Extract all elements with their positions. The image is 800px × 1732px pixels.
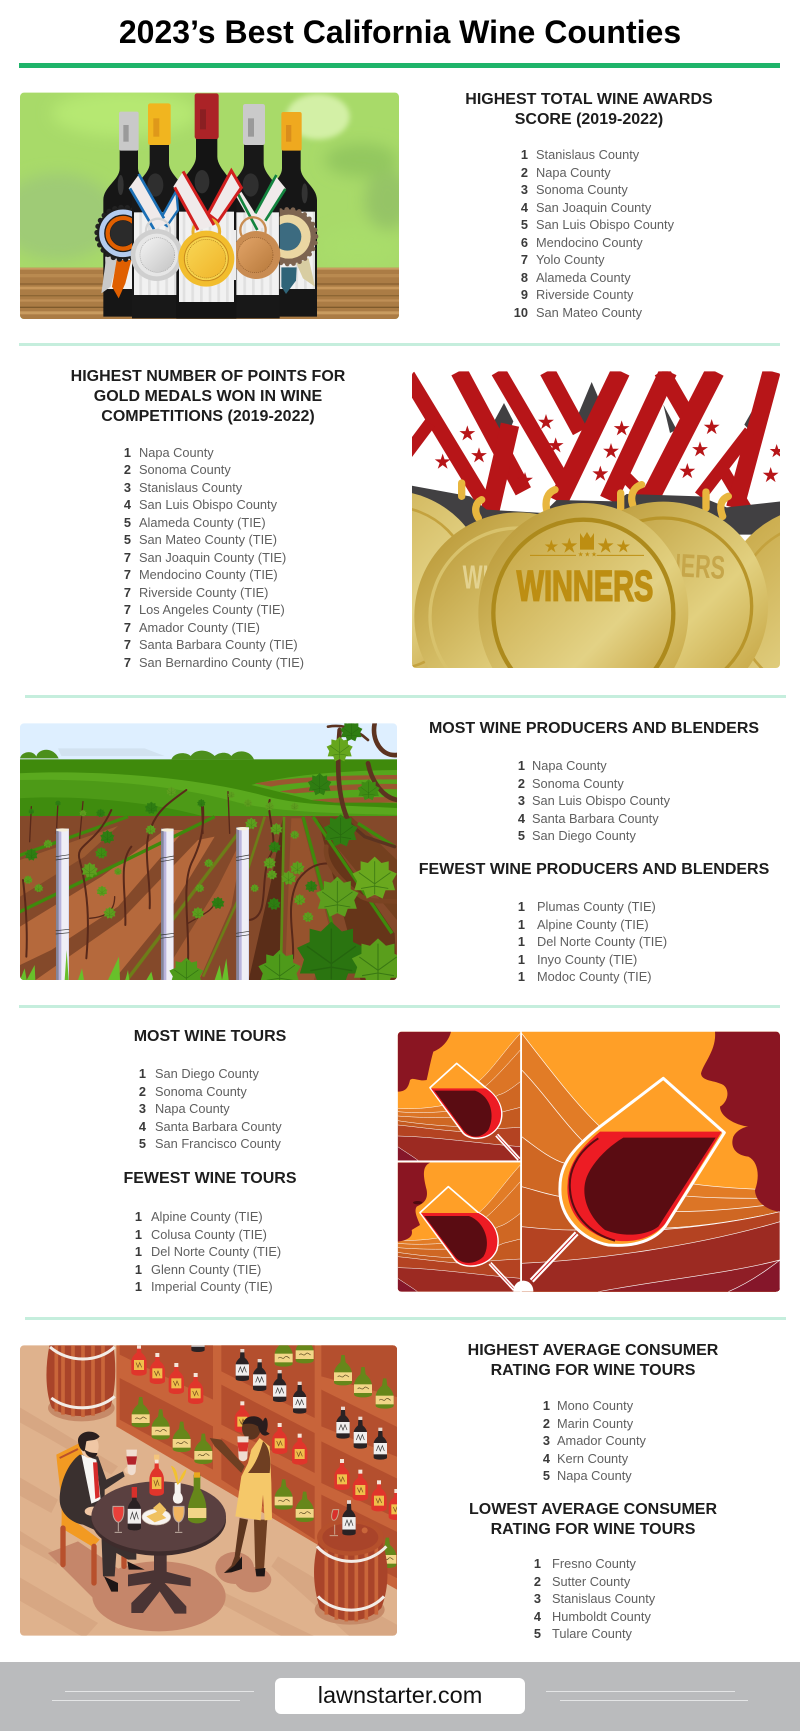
ranked list: Sonoma County (536, 182, 628, 197)
ranked list: 2 (139, 1084, 146, 1099)
ranked list: Yolo County (536, 252, 605, 267)
ranked list: 8 (521, 270, 528, 285)
table setting (113, 1455, 206, 1532)
ranked list: Napa County (536, 165, 611, 180)
ranked list: 6 (521, 235, 528, 250)
ranked list: Inyo County (TIE) (537, 952, 637, 967)
ranked list: Humboldt County (552, 1609, 651, 1624)
logo: lawnstarter.com (275, 1678, 525, 1714)
bottle right (278, 112, 317, 317)
ranked list: 2 (543, 1416, 550, 1431)
ranked list: Riverside County (536, 287, 633, 302)
ranked list: 3 (139, 1101, 146, 1116)
heading (468, 1342, 718, 1379)
ranked list: Tulare County (552, 1626, 632, 1641)
ranked list: San Luis Obispo County (536, 217, 674, 232)
ranked list: Fresno County (552, 1556, 636, 1571)
ranked list: 5 (534, 1626, 541, 1641)
ranked list: Santa Barbara County (TIE) (139, 637, 298, 652)
ranked list: San Francisco County (155, 1136, 281, 1151)
ranked list: Napa County (139, 444, 214, 460)
ranked list: San Luis Obispo County (139, 497, 277, 512)
main medal (478, 503, 688, 668)
rosette left (94, 205, 132, 298)
ranked list: Alameda County (TIE) (139, 514, 266, 530)
green fields (18, 759, 400, 817)
ranked list (518, 758, 670, 843)
floor (18, 1343, 400, 1638)
ranked list (543, 1398, 646, 1483)
ranked list: 1 (124, 444, 131, 460)
illustration: wine bottles with medals (20, 92, 399, 319)
ranked list: 2 (518, 776, 525, 791)
ranked list: 5 (543, 1468, 550, 1483)
logo: lawnstarter.com: lawnstarter.com (318, 1682, 482, 1708)
heading: SCORE (2019-2022) (515, 111, 663, 128)
ranked list: 7 (124, 654, 131, 670)
ranked list: 3 (518, 793, 525, 808)
small glass bottom (420, 1187, 514, 1289)
ranked list: Colusa County (TIE) (151, 1227, 267, 1242)
wine shelves (116, 1343, 400, 1591)
ranked list: Mendocino County (TIE) (139, 567, 278, 582)
ranked list: 7 (124, 567, 131, 582)
heading: MOST WINE PRODUCERS AND BLENDERS (429, 720, 759, 737)
heading: GOLD MEDALS WON IN WINE (94, 388, 322, 405)
ranked list (534, 1556, 656, 1641)
ranked list: Glenn County (TIE) (151, 1262, 261, 1277)
ranked list: 7 (124, 620, 131, 634)
ranked list: Stanislaus County (552, 1591, 655, 1606)
heading (465, 91, 713, 128)
dark diamonds (494, 382, 752, 433)
large glass (513, 1078, 724, 1301)
ranked list: 4 (521, 200, 528, 215)
bottle second (132, 103, 178, 318)
big vine (326, 723, 397, 902)
ranked list: 4 (139, 1119, 146, 1134)
ranked list: 4 (518, 811, 525, 826)
ranked list: 4 (543, 1451, 550, 1466)
bottle centre (176, 93, 236, 319)
medal loops (462, 483, 728, 518)
bushes (20, 750, 254, 759)
ranked list: 1 (135, 1279, 142, 1294)
ranked list: 3 (521, 182, 528, 197)
ranked list: San Luis Obispo County (532, 793, 670, 808)
ranked list: Marin County (557, 1416, 633, 1431)
table shadow (92, 1561, 226, 1631)
ranked list: 3 (124, 480, 131, 494)
panel: gold medal points (71, 368, 780, 670)
ranked list: Del Norte County (TIE) (151, 1244, 281, 1259)
ranked list: Kern County (557, 1451, 628, 1466)
ranked list: 4 (534, 1609, 541, 1624)
heading: HIGHEST TOTAL WINE AWARDS (465, 91, 713, 108)
ranked list: 5 (518, 828, 525, 843)
ranked list: Amador County (TIE) (139, 620, 260, 634)
ranked list: 1 (518, 952, 525, 967)
ranked list: Riverside County (TIE) (139, 584, 268, 600)
ranked list: 5 (124, 532, 131, 547)
ranked list: 1 (518, 969, 525, 984)
heading: FEWEST WINE PRODUCERS AND BLENDERS (419, 861, 769, 878)
title: 2023’s Best California Wine Counties (119, 14, 681, 50)
ranked list (139, 1066, 282, 1151)
ribbons (405, 371, 772, 511)
ranked list: 5 (521, 217, 528, 232)
ranked list: 1 (543, 1398, 550, 1413)
ranked list: 2 (521, 165, 528, 180)
seated man (60, 1432, 145, 1592)
heading: MOST WINE TOURS (134, 1028, 286, 1045)
ranked list: 1 (139, 1066, 146, 1081)
ranked list: 3 (534, 1591, 541, 1606)
ranked list: 7 (124, 550, 131, 564)
ranked list: 10 (514, 305, 528, 320)
bottle fourth (236, 104, 280, 318)
metal posts (56, 827, 249, 982)
panel: wine producers and blenders (20, 720, 769, 984)
illustration: vineyard (20, 723, 397, 980)
right medal: WINNERS (623, 544, 726, 586)
ranked list: Napa County (532, 758, 607, 773)
silver medal (129, 173, 183, 281)
ranked list: 2 (534, 1574, 541, 1589)
ranked list: Alpine County (TIE) (537, 917, 649, 932)
heading: RATING FOR WINE TOURS (491, 1521, 695, 1538)
green row lines (18, 817, 395, 983)
barrel top left (46, 1343, 115, 1421)
ranked list: San Joaquin County (TIE) (139, 550, 286, 564)
grape vines (23, 790, 328, 962)
ranked list: San Mateo County (536, 305, 642, 320)
main medal: WINNERS (517, 563, 653, 611)
top-left scene (398, 1032, 520, 1161)
ranked list (135, 1209, 281, 1294)
ranked list: Imperial County (TIE) (151, 1279, 273, 1294)
ranked list: 5 (139, 1136, 146, 1151)
standing woman (210, 1416, 272, 1576)
grass (20, 950, 229, 980)
ranked list: 7 (124, 584, 131, 600)
ranked list: 1 (518, 758, 525, 773)
heading (71, 368, 345, 425)
illustration: wine tasting room (20, 1345, 397, 1636)
illustration: gold winners medals with ribbons (412, 371, 780, 668)
ranked list: Napa County (155, 1101, 230, 1116)
ranked list: Mendocino County (536, 235, 643, 250)
ranked list: San Mateo County (TIE) (139, 532, 277, 547)
ranked list: 1 (135, 1244, 142, 1259)
ranked list: Sutter County (552, 1574, 630, 1589)
ranked list: 1 (518, 899, 525, 914)
ranked list: San Joaquin County (536, 200, 651, 215)
barrel bottom right (314, 1500, 388, 1625)
ranked list: Sonoma County (155, 1084, 247, 1099)
bottle left (103, 112, 142, 317)
ranked list: Stanislaus County (139, 480, 242, 494)
ranked list: 1 (518, 917, 525, 932)
soil rows (18, 816, 400, 983)
panel: highest total wine awards score (20, 91, 713, 320)
ranked list: Alameda County (536, 270, 631, 285)
ranked list: Modoc County (TIE) (537, 969, 652, 984)
ranked list: San Diego County (532, 828, 636, 843)
ranked list (124, 444, 304, 670)
ranked list: Plumas County (TIE) (537, 899, 656, 914)
ranked list: 7 (124, 602, 131, 617)
heading (469, 1501, 717, 1538)
ranked list: 1 (521, 147, 528, 162)
heading: HIGHEST NUMBER OF POINTS FOR (71, 368, 345, 385)
ranked list: Del Norte County (TIE) (537, 934, 667, 949)
pedestal table (91, 1481, 226, 1614)
heading: HIGHEST AVERAGE CONSUMER (468, 1342, 718, 1359)
ranked list: 5 (124, 514, 131, 530)
ranked list: 1 (135, 1227, 142, 1242)
heading: RATING FOR WINE TOURS (491, 1362, 695, 1379)
left medal: WINNERS (463, 560, 563, 597)
panel: consumer ratings for wine tours (20, 1342, 718, 1641)
vine leaves (23, 787, 318, 922)
stars (435, 414, 784, 487)
illustration: tilted wine glasses (398, 1032, 780, 1292)
far medals (412, 493, 780, 668)
chair (56, 1443, 124, 1583)
panel: wine tours (123, 1028, 780, 1294)
ranked list: Alpine County (TIE) (151, 1209, 263, 1224)
ranked list: Sonoma County (139, 462, 231, 477)
ranked list (518, 899, 667, 984)
ranked list: 1 (135, 1209, 142, 1224)
big leaves (169, 720, 404, 990)
right landscape (522, 1032, 782, 1295)
wooden table (18, 268, 402, 322)
ranked list: 9 (521, 287, 528, 302)
ranked list: Mono County (557, 1398, 633, 1413)
ranked list: Stanislaus County (536, 147, 639, 162)
footer band (0, 1662, 800, 1731)
left medal (414, 512, 538, 668)
heading: FEWEST WINE TOURS (123, 1170, 297, 1187)
bronze medal (231, 175, 286, 280)
ranked list: Santa Barbara County (532, 811, 659, 826)
ranked list: 7 (521, 252, 528, 267)
bottom-left scene (398, 1162, 520, 1292)
ranked list: 1 (135, 1262, 142, 1277)
ranked list: San Bernardino County (TIE) (139, 654, 304, 670)
ranked list: Amador County (557, 1433, 646, 1448)
ranked list: 3 (543, 1433, 550, 1448)
ranked list: 4 (124, 497, 131, 512)
woman shadow (215, 1552, 271, 1592)
rosette right (280, 207, 318, 294)
ranked list: Sonoma County (532, 776, 624, 791)
ranked list (514, 147, 674, 320)
small glass top (430, 1063, 519, 1159)
ranked list: Santa Barbara County (155, 1119, 282, 1134)
ranked list: Napa County (557, 1468, 632, 1483)
ranked list: 7 (124, 637, 131, 652)
gold medal (173, 171, 241, 287)
bottles on shelves (131, 1320, 404, 1568)
ranked list: 1 (534, 1556, 541, 1571)
ranked list: Los Angeles County (TIE) (139, 602, 285, 617)
heading: LOWEST AVERAGE CONSUMER (469, 1501, 717, 1518)
ranked list: 2 (124, 462, 131, 477)
heading: COMPETITIONS (2019-2022) (101, 408, 315, 425)
right medal (622, 502, 768, 668)
ranked list: San Diego County (155, 1066, 259, 1081)
ranked list: 1 (518, 934, 525, 949)
